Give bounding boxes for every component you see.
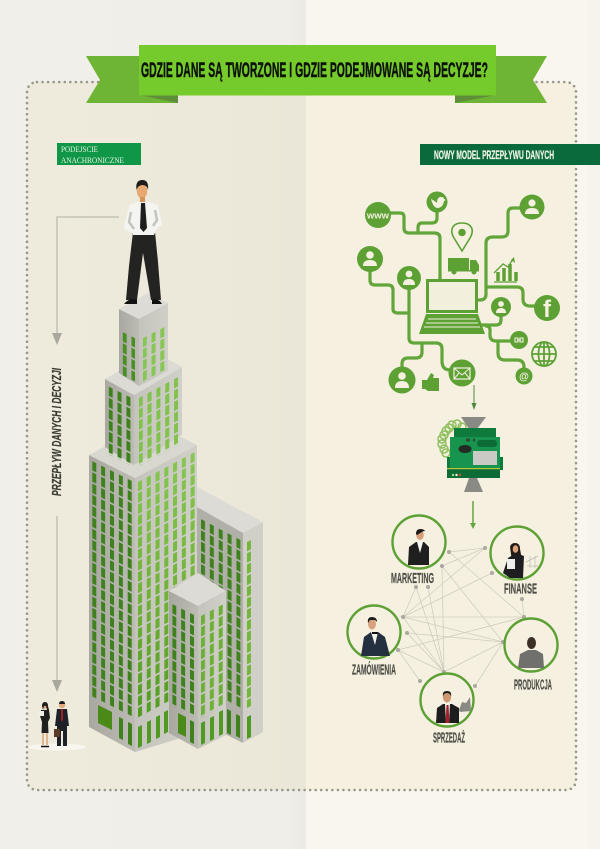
icon: person bottom	[388, 366, 416, 394]
background: left half	[0, 0, 306, 849]
flow label: PRZEPŁYW DANYCH I DECYZJI	[50, 368, 64, 496]
icon: envelope	[448, 360, 476, 386]
small tower	[169, 573, 226, 749]
icon: bird	[426, 192, 448, 212]
dotted frame	[27, 82, 576, 790]
icon: laptop	[419, 280, 485, 334]
network nodes	[396, 546, 526, 688]
flow arrow: top	[52, 217, 119, 345]
skyscraper	[89, 293, 263, 752]
arrow to departments	[470, 501, 476, 529]
label: old approach: PODEJSCIE	[61, 145, 98, 154]
ribbon left tail	[86, 56, 178, 103]
icon: www	[365, 202, 391, 228]
label: old approach: ANACHRONICZNE	[61, 156, 124, 165]
icon: facebook	[534, 295, 560, 323]
icon: person inner	[397, 266, 421, 290]
department: orders	[348, 606, 400, 678]
department: finance	[490, 526, 544, 598]
department network	[348, 516, 558, 746]
flow arrow: bottom	[52, 516, 62, 692]
man with briefcase	[54, 701, 69, 746]
man on top of the tower	[124, 180, 162, 304]
label: new model	[420, 144, 600, 165]
department: marketing	[391, 516, 446, 587]
department: sales: SPRZEDAŻ	[433, 730, 465, 746]
tier two	[105, 351, 182, 466]
ribbon main band	[139, 45, 496, 96]
machine lights	[452, 474, 461, 476]
business people at the bottom	[28, 701, 86, 750]
inner panel: right	[306, 82, 576, 790]
inner panel: left	[27, 82, 306, 790]
icon: facebook: f	[543, 296, 552, 323]
icon: www: www	[366, 210, 390, 222]
ribbon right tail	[455, 56, 547, 103]
department: marketing: MARKETING	[391, 570, 434, 587]
department: sales	[420, 674, 474, 746]
icon: link	[510, 331, 528, 349]
data machine	[438, 417, 503, 492]
icon: growth chart	[494, 257, 517, 282]
network diagram	[357, 192, 560, 394]
main tower	[89, 436, 197, 752]
woman	[39, 702, 50, 746]
department: finance: FINANSE	[504, 580, 537, 598]
label: old approach	[57, 143, 141, 165]
icon: globe	[532, 342, 556, 366]
wing building	[197, 487, 263, 743]
arrow to machine	[472, 385, 476, 410]
network lines	[398, 548, 524, 686]
icon: location pin	[452, 223, 472, 251]
connector lines	[370, 208, 535, 370]
background: right edge strip	[588, 0, 600, 849]
tier one	[119, 293, 168, 386]
icon: thumbs up	[422, 373, 439, 391]
background: right half	[306, 0, 600, 849]
coil	[438, 420, 466, 457]
title ribbon	[86, 45, 547, 103]
icon: at sign: @	[519, 372, 529, 382]
department network: ZAMÓWIENIA	[352, 660, 396, 678]
icon: person top right	[520, 194, 544, 220]
icon: at sign	[516, 368, 532, 384]
department: production	[504, 618, 558, 694]
icon: truck	[448, 258, 479, 274]
icon: person right	[491, 297, 511, 317]
icon: person left	[357, 246, 383, 272]
ribbon right fold	[455, 95, 496, 103]
ribbon left fold	[139, 95, 178, 103]
